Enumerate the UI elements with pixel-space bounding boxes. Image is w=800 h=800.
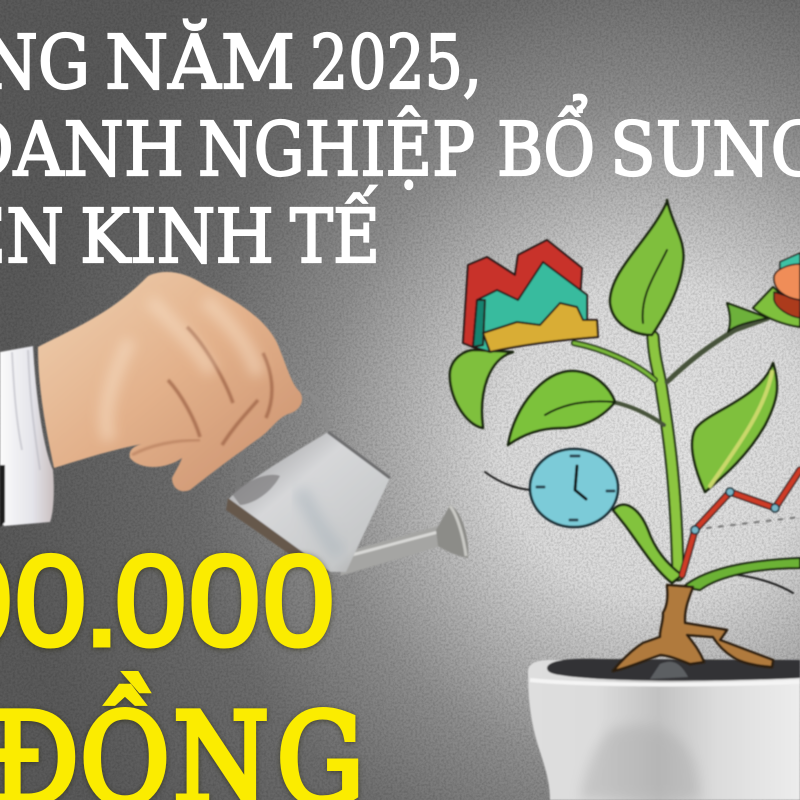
chart: red layer (463, 240, 582, 350)
title line 3 (0, 184, 380, 280)
chart: gold layer (483, 303, 598, 352)
leaf: bottom right (683, 558, 800, 590)
clock icon (530, 449, 618, 527)
leaf: lower left (613, 505, 682, 583)
chart: teal layer (473, 262, 587, 352)
title line 2: BỔ (497, 93, 595, 193)
soil (547, 659, 800, 681)
watering can (226, 392, 468, 576)
title line 3: KINH (80, 194, 274, 280)
title line 1: 2025, (310, 20, 482, 106)
title line 2 (0, 93, 800, 193)
title line 1 (0, 18, 482, 106)
hand (38, 272, 302, 491)
leaf: upper right (727, 287, 800, 332)
chart: area mountains (463, 240, 598, 352)
leaf: middle left (508, 371, 615, 445)
leaf: left curved (450, 350, 513, 428)
title line 1: NĂM (105, 18, 295, 106)
title line 3: TẾ (290, 185, 380, 280)
title (0, 18, 800, 280)
jacket sleeve (0, 465, 5, 527)
title line 2: NGHIỆP (198, 105, 475, 193)
illustration: hand holding watering can (0, 272, 468, 576)
flower pot (528, 659, 800, 800)
line chart: red trend (682, 470, 800, 575)
shirt cuff (0, 346, 54, 526)
plant stems (485, 318, 793, 593)
plant illustration (450, 200, 800, 671)
leaf: lower right (692, 363, 777, 492)
trunk and roots (613, 585, 773, 671)
leaf: top (610, 200, 683, 335)
chart: cylinder (774, 253, 800, 318)
